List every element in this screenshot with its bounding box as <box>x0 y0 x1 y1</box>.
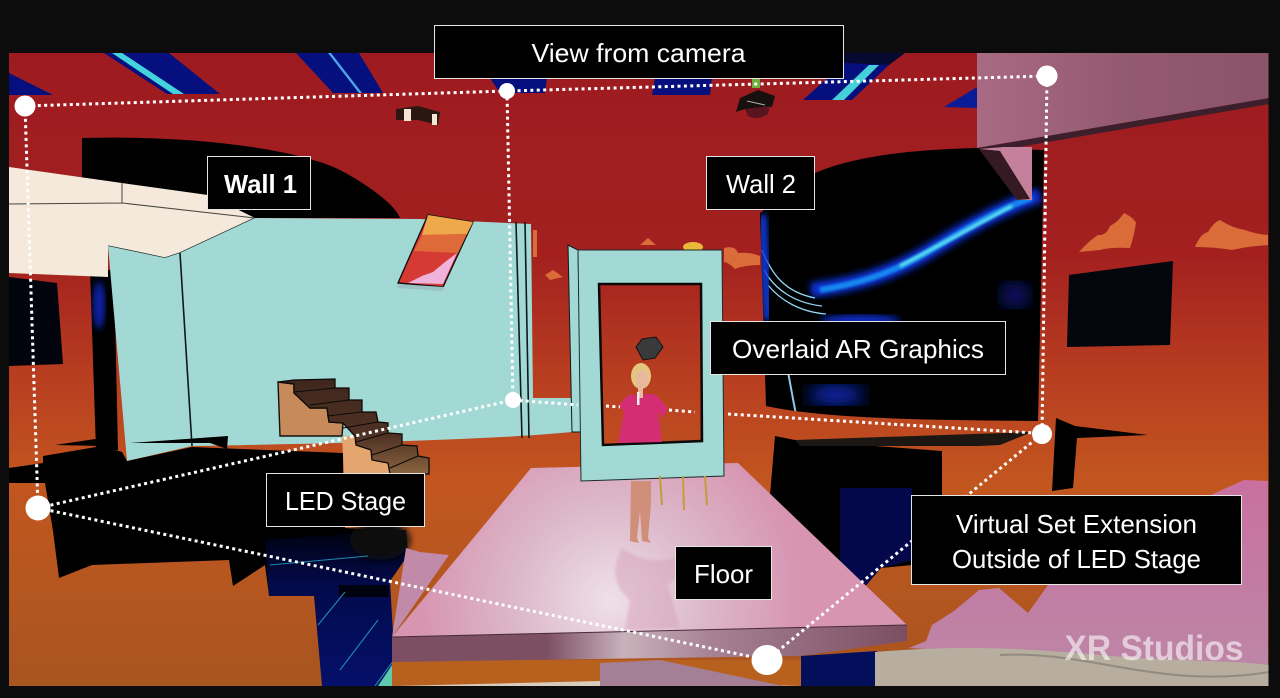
black wedges <box>55 436 228 449</box>
cream ground <box>875 648 1269 687</box>
label: virtual set extension: Virtual Set Extension <box>956 509 1197 539</box>
corner markers <box>14 66 1058 675</box>
watermark: XR Studios <box>1064 629 1244 668</box>
poster on wall <box>397 215 473 291</box>
teal wall 1 with side panel <box>108 218 572 461</box>
right black box structure <box>770 436 942 600</box>
singer <box>618 363 707 543</box>
dotted perspective lines <box>25 76 1047 660</box>
label: floor: Floor <box>694 559 753 589</box>
black post <box>1052 418 1148 491</box>
label: overlaid AR graphics <box>710 322 1006 374</box>
singer shadow on floor <box>615 548 684 630</box>
navy column right <box>801 651 877 686</box>
cream sliver <box>396 681 800 686</box>
ceiling fixture: hanging light <box>736 78 775 118</box>
platform legs <box>600 660 783 686</box>
wall 1 black opening <box>82 138 400 218</box>
stairs <box>278 379 429 474</box>
light streaks <box>270 556 394 686</box>
label: wall 1 <box>208 156 310 210</box>
navy extension column <box>265 530 408 686</box>
wall edges <box>180 222 529 446</box>
blue glow <box>93 281 105 329</box>
ceiling light strips <box>9 53 977 108</box>
label: overlaid AR graphics: Overlaid AR Graphics <box>732 334 984 364</box>
set extension black structure left <box>9 446 408 596</box>
cream beam <box>9 167 255 277</box>
right black screen <box>1067 261 1173 347</box>
left black screen <box>9 277 63 366</box>
label: LED stage <box>266 474 424 526</box>
pink clouds <box>909 480 1268 670</box>
label: LED stage: LED Stage <box>285 486 406 516</box>
yellow sun <box>683 242 703 250</box>
label: virtual set extension: Outside of LED Stage <box>952 544 1201 574</box>
background clouds <box>533 213 1268 280</box>
black column <box>90 270 118 450</box>
beam lines <box>9 183 255 218</box>
label: view from camera: View from camera <box>532 38 746 68</box>
dark blob on column <box>350 520 410 560</box>
box navy <box>840 488 912 590</box>
label: wall 2 <box>706 156 814 210</box>
label: virtual set extension <box>912 496 1242 584</box>
ceiling fixture: lights <box>396 106 440 125</box>
pink floor side region <box>392 548 449 637</box>
floor platform <box>392 463 907 662</box>
label: view from camera <box>434 26 844 78</box>
AR rock <box>636 337 663 360</box>
singer backdrop frame <box>568 245 724 481</box>
box top plate <box>795 432 1032 446</box>
pink overhead block <box>977 53 1269 200</box>
label: floor <box>676 546 772 600</box>
orange band under floor <box>392 660 804 687</box>
wall 2 LED screen <box>755 145 1055 430</box>
label: wall 2: Wall 2 <box>726 169 796 199</box>
label: wall 1: Wall 1 <box>224 169 297 199</box>
